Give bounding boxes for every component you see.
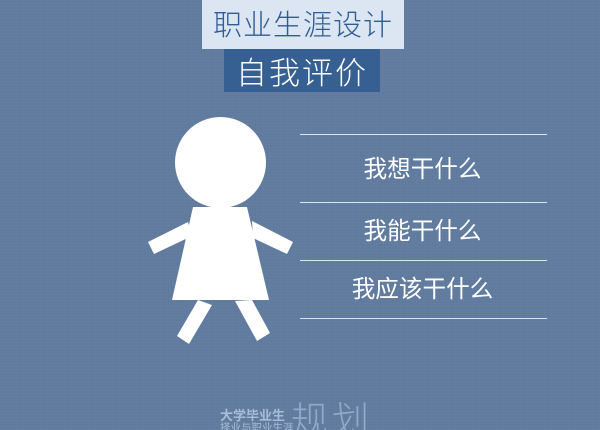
title banner: 职业生涯设计	[213, 2, 393, 44]
person figure icon	[148, 117, 293, 344]
text: question three: 我应该干什么	[352, 277, 493, 303]
text: question two: 我能干什么	[364, 219, 481, 245]
text: question one: 我想干什么	[364, 157, 481, 183]
footer logo: 大学毕业生	[220, 408, 285, 423]
footer logo	[220, 395, 373, 430]
